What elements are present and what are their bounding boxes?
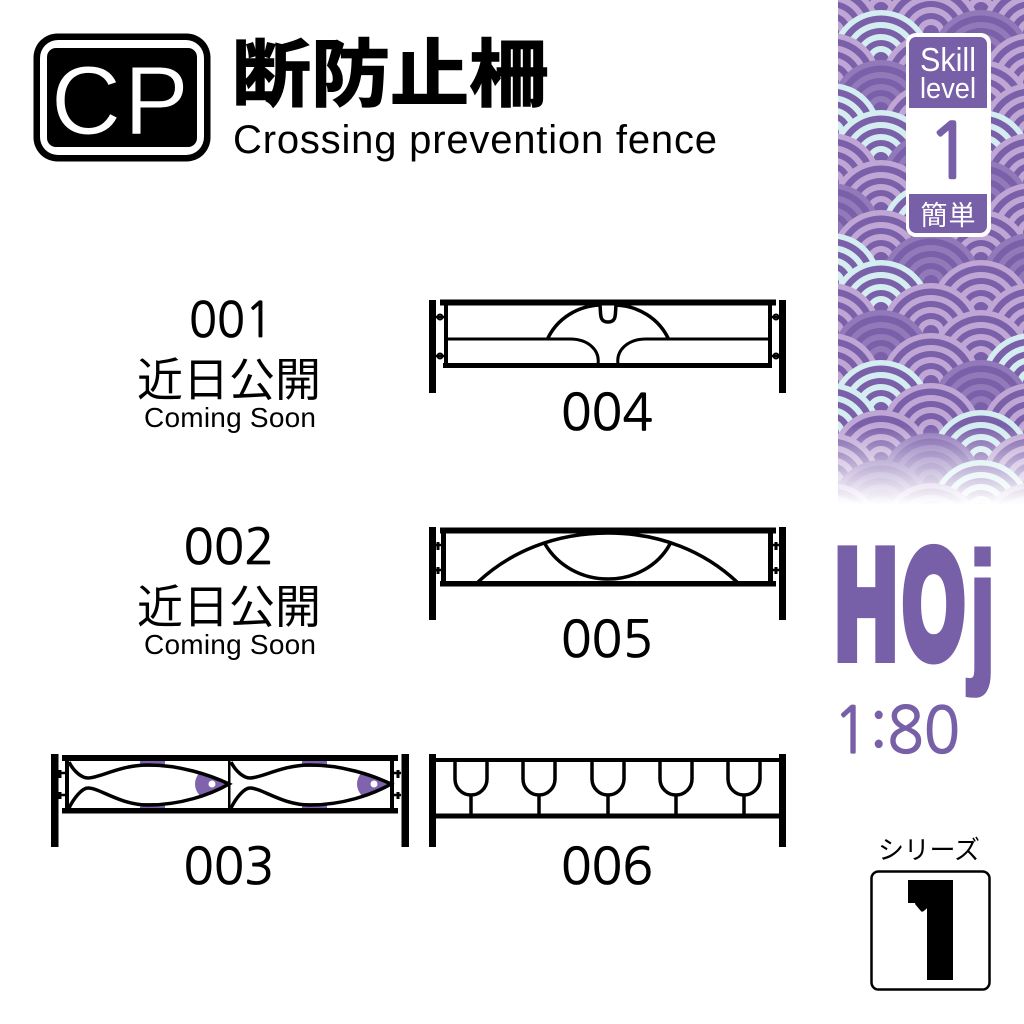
gauge label: HOj xyxy=(836,518,997,698)
panel: skill level card xyxy=(906,33,991,237)
label: fence 002: 002 xyxy=(184,523,274,572)
label: fence 001 xyxy=(137,296,321,433)
label: fence 002: Coming Soon xyxy=(144,629,316,660)
fence diagram: 004 xyxy=(429,300,786,393)
label: fence 001: Coming Soon xyxy=(144,402,316,433)
box: series number: 1 xyxy=(899,873,975,998)
number: 003: 003 xyxy=(184,842,274,892)
scale label: 1:80: 1:80 xyxy=(833,699,960,763)
fence diagram: 006 xyxy=(429,754,786,847)
number: 006: 006 xyxy=(561,842,653,892)
fence diagram: 005 xyxy=(429,527,786,620)
panel: skill level card: 簡単 xyxy=(920,201,976,231)
label: fence 002 xyxy=(137,523,321,660)
label: series: シリーズ xyxy=(878,830,980,867)
label: fence 001: 近日公開 xyxy=(137,354,321,406)
title: Japanese: 断防止柵 xyxy=(232,35,548,116)
gauge label: HOj: j xyxy=(966,521,997,698)
panel: wave pattern background xyxy=(838,0,1024,501)
badge: CP xyxy=(34,34,210,162)
gauge label: HOj: H xyxy=(836,520,897,690)
label: fence 002: 近日公開 xyxy=(137,581,321,633)
panel: skill level card: 1 xyxy=(927,113,973,189)
number: 005: 005 xyxy=(561,615,653,665)
badge: CP: CP xyxy=(51,46,189,155)
panel: skill level card: Skill xyxy=(920,41,976,78)
fence diagram: 003 xyxy=(51,754,409,847)
number: 004: 004 xyxy=(561,388,653,438)
panel: skill level card: level xyxy=(920,73,976,105)
label: fence 001: 001 xyxy=(189,296,273,345)
subtitle: English: Crossing prevention fence xyxy=(233,118,717,162)
box: series number xyxy=(872,872,990,998)
gauge label: HOj: O xyxy=(903,518,964,689)
